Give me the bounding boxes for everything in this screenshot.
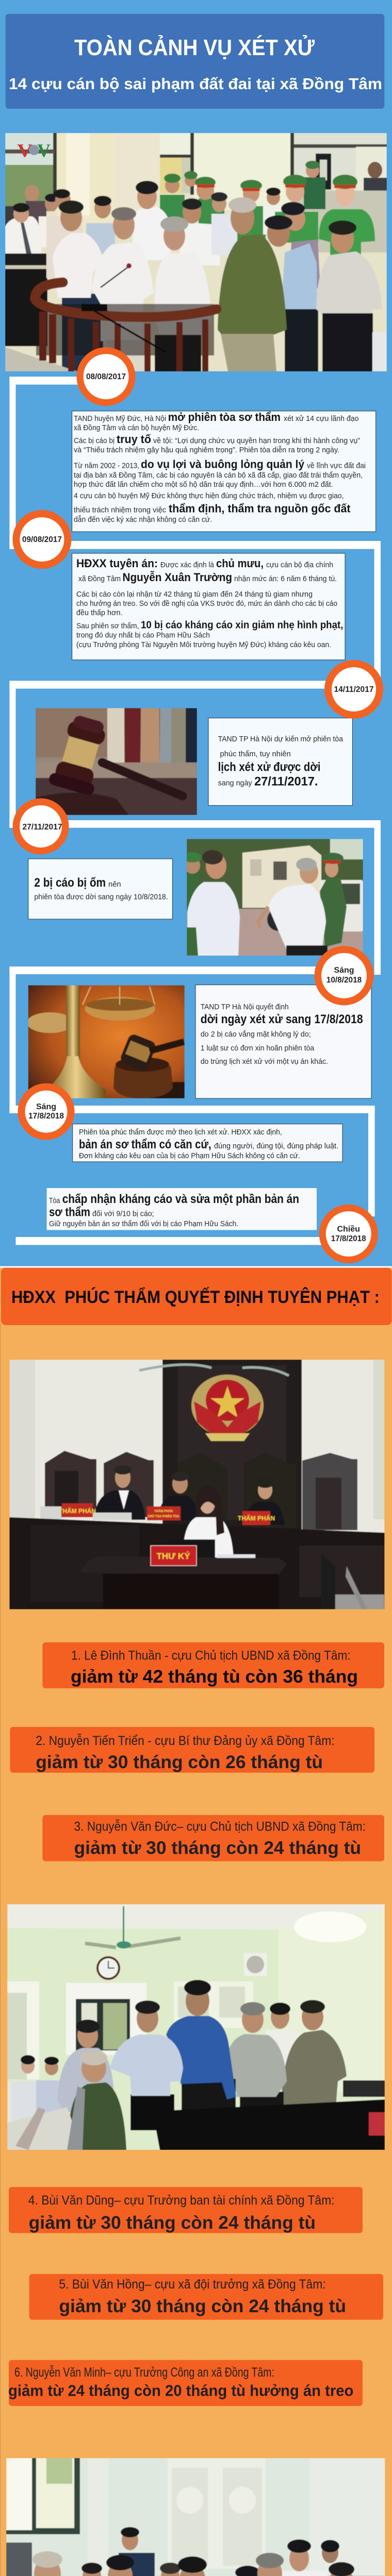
text box: trial moved to 17/8/2018 xyxy=(195,985,371,1098)
text box: hearing postponed to 27/11/2017 xyxy=(208,718,352,805)
date circle: 09/08/2017: 09/08/2017 xyxy=(22,535,62,544)
text box: court accepts appeal: sơ thẩm xyxy=(49,1206,90,1219)
text box: hearing postponed to 27/11/2017: TAND TP Hà Nội dự kiến mở phiên tòa xyxy=(218,735,344,743)
text box: verdict at first instance: Nguyễn Xuân Trường xyxy=(123,571,232,584)
sentence row 3: giảm từ 30 tháng còn 24 tháng tù xyxy=(74,1838,361,1858)
text box: first-instance trial: và “Thiếu trách nhiệm gây hậu quả nghiêm trọng”. Phiên tòa diễn ra trong 2 ngày. xyxy=(74,446,339,454)
date circle: 09/08/2017 xyxy=(12,510,71,569)
text box: first-instance trial: truy tố xyxy=(117,433,151,446)
text box: first-instance trial: TAND huyện Mỹ Đức, Hà Nội xyxy=(74,414,166,423)
text box: appeal hearing finding: Phiên tòa phúc thẩm được mở theo lịch xét xử. HĐXX xác định, xyxy=(79,1128,282,1137)
text box: first-instance trial: thẩm định, thẩm tra nguồn gốc đất xyxy=(169,502,351,515)
text box: verdict at first instance: cho hưởng án treo. So với đề nghị của VKS trước đó, mức án dành cho các bị cáo xyxy=(76,599,337,608)
text box: hearing postponed to 27/11/2017: phúc thẩm, tuy nhiên xyxy=(220,750,291,758)
date circle: 14/11/2017: 14/11/2017 xyxy=(334,685,374,694)
text box: first-instance trial: do vụ lợi và buông lỏng quản lý xyxy=(141,457,305,471)
text box: first-instance trial: hợp thức đất lấn chiếm cho một số hộ dân trái quy định…với hơn 6.000 m2 đất. xyxy=(74,480,333,489)
text box: trial moved to 17/8/2018: TAND TP Hà Nội quyết định xyxy=(201,1003,289,1011)
text box: verdict at first instance: Sau phiên sơ thẩm, xyxy=(76,622,139,631)
text box: hearing postponed to 27/11/2017: lịch xét xử được dời xyxy=(218,760,320,774)
logo: VOV watermark: V xyxy=(17,140,32,161)
date circle: morning 10/8/2018: Sáng xyxy=(334,966,354,975)
sentence row 1 xyxy=(42,1642,384,1688)
title: TOÀN CẢNH VỤ XÉT XỬ xyxy=(74,34,315,60)
text box: first-instance trial: xét xử 14 cựu lãnh đạo xyxy=(284,414,359,423)
sentence row 1: giảm từ 42 tháng tù còn 36 tháng xyxy=(71,1667,358,1687)
sentence row 3: 3. Nguyễn Văn Đức– cựu Chủ tịch UBND xã Đồng Tâm: xyxy=(74,1819,366,1834)
date circle: 27/11/2017: 27/11/2017 xyxy=(23,823,62,832)
sentence row 1: 1. Lê Đình Thuần - cựu Chủ tịch UBND xã Đồng Tâm: xyxy=(71,1648,351,1663)
date circle: 27/11/2017 xyxy=(12,799,69,854)
text box: first-instance trial: Các bị cáo bị xyxy=(74,436,115,445)
text box: verdict at first instance: chủ mưu, xyxy=(216,557,264,570)
panel: header xyxy=(6,14,384,109)
text box: two defendants ill: nên xyxy=(108,880,121,889)
sentence row 6: 6. Nguyễn Văn Minh– cựu Trưởng Công an xã Đồng Tâm: xyxy=(14,2365,274,2380)
text box: first-instance trial: về tội: “Lợi dụng chức vụ quyền hạn trong khi thi hành công vụ” xyxy=(153,436,360,445)
text box: first-instance trial: Từ năm 2002 - 2013, xyxy=(74,462,139,470)
text box: two defendants ill xyxy=(28,859,172,919)
text box: first-instance trial: thiếu trách nhiệm trong việc xyxy=(74,506,166,515)
text box: appeal hearing finding: bản án sơ thẩm có căn cứ, xyxy=(79,1138,211,1151)
text box: appeal hearing finding: Đơn kháng cáo kêu oan của bị cáo Phạm Hữu Sách không có căn cứ. xyxy=(79,1151,300,1160)
date circle: afternoon 17/8/2018: 17/8/2018 xyxy=(331,1234,366,1243)
text box: verdict at first instance: xã Đồng Tâm xyxy=(78,574,121,583)
photo: appeal court judges' bench xyxy=(9,1360,385,1609)
date circle: afternoon 17/8/2018: Chiều xyxy=(337,1225,360,1234)
text box: trial moved to 17/8/2018: dời ngày xét xử sang 17/8/2018 xyxy=(201,1012,363,1026)
date circle: afternoon 17/8/2018 xyxy=(319,1205,378,1263)
subtitle: 14 cựu cán bộ sai phạm đất đai tại xã Đồng Tâm xyxy=(9,75,382,93)
text box: verdict at first instance: Các bị cáo còn lại nhận từ 42 tháng tù giam đến 24 tháng tù giam nhưng xyxy=(76,590,313,599)
text box: court accepts appeal: đối với 9/10 bị cáo; xyxy=(92,1210,154,1218)
photo: appeal court judges' bench: THƯ KÝ xyxy=(156,1551,190,1561)
text box: court accepts appeal: Giữ nguyên bản án sơ thẩm đối với bị cáo Phạm Hữu Sách. xyxy=(49,1219,238,1228)
sentence row 5: giảm từ 30 tháng còn 24 tháng tù xyxy=(59,2296,346,2316)
photo: appeal court judges' bench: CHỦ TỌA PHIÊN TÒA xyxy=(148,1514,179,1518)
sentence row 3 xyxy=(42,1815,384,1861)
text box: court accepts appeal xyxy=(47,1188,317,1230)
text box: verdict at first instance: trong đó duy nhất bị cáo Phạm Hữu Sách xyxy=(76,631,210,640)
panel: appeal verdict heading xyxy=(0,1266,392,1325)
logo: VOV watermark: V xyxy=(37,140,51,161)
text box: trial moved to 17/8/2018: do trùng lịch xét xử với một vụ án khác. xyxy=(201,1057,328,1066)
date circle: 08/08/2017: 08/08/2017 xyxy=(86,372,126,381)
text box: court accepts appeal: chấp nhận kháng cáo và sửa một phần bản án xyxy=(62,1192,299,1206)
date circle: morning 17/8/2018: Sáng xyxy=(36,1103,56,1111)
date circle: morning 17/8/2018 xyxy=(18,1083,74,1140)
photo: appeal court judges' bench: THẨM PHÁN xyxy=(154,1510,173,1513)
logo: VOV watermark xyxy=(17,140,51,161)
date circle: 14/11/2017 xyxy=(324,660,383,719)
text box: verdict at first instance xyxy=(72,553,345,660)
sentence row 4 xyxy=(9,2187,363,2233)
photo: defendants escorted from prison van xyxy=(187,839,363,956)
sentence row 4: 4. Bùi Văn Dũng– cựu Trưởng ban tài chính xã Đồng Tâm: xyxy=(28,2193,335,2208)
text box: verdict at first instance: nhận mức án: 6 năm 6 tháng tù. xyxy=(234,574,337,583)
text box: appeal hearing finding xyxy=(73,1124,342,1162)
text box: verdict at first instance: Được xác định là xyxy=(160,561,215,569)
panel: timeline blue background xyxy=(0,0,392,1266)
date circle: morning 10/8/2018 xyxy=(315,946,373,1005)
photo: scales of justice and gavel xyxy=(28,985,185,1098)
text box: court accepts appeal: Tòa xyxy=(49,1196,60,1205)
text box: two defendants ill: 2 bị cáo bị ốm xyxy=(34,876,106,890)
text box: first-instance trial: về lĩnh vực đất đai xyxy=(307,462,366,470)
text box: verdict at first instance: đều thấp hơn. xyxy=(76,608,123,617)
text box: first-instance trial xyxy=(72,411,376,532)
text box: verdict at first instance: cựu cán bộ địa chính xyxy=(266,561,333,569)
photo: defendants seated in court xyxy=(6,2458,385,2576)
sentence row 2 xyxy=(10,1727,374,1773)
photo: appeal court judges' bench: THẨM PHÁN xyxy=(238,1514,275,1522)
text box: first-instance trial: tại địa bàn xã Đồng Tâm, các bị cáo nguyên là cán bộ xã đã cấp, giao đất trái thẩm quyền, xyxy=(74,471,363,480)
text box: appeal hearing finding: đúng người, đúng tội, đúng pháp luật. xyxy=(214,1142,338,1150)
text box: verdict at first instance: 10 bị cáo kháng cáo xin giảm nhẹ hình phạt, xyxy=(141,620,344,631)
text box: trial moved to 17/8/2018: do 2 bị cáo vắng mặt không lý do; xyxy=(201,1030,311,1039)
photo: defendants standing at appeal hearing xyxy=(7,1904,385,2150)
photo: appeal court judges' bench: THẨM PHÁN xyxy=(59,1507,96,1515)
photo: defendants standing in court xyxy=(5,133,387,371)
text box: hearing postponed to 27/11/2017: sang ngày xyxy=(218,779,252,787)
date circle: morning 10/8/2018: 10/8/2018 xyxy=(326,976,362,985)
text box: first-instance trial: 4 cựu cán bộ huyện Mỹ Đức không thực hiện đúng chức trách, nhiệm vụ được giao, xyxy=(74,492,344,500)
text box: verdict at first instance: (cựu Trưởng phòng Tài Nguyên Môi trường huyện Mỹ Đức) kháng cáo kêu oan. xyxy=(76,640,331,649)
text box: first-instance trial: dẫn đến việc ký xác nhận không có căn cứ. xyxy=(74,515,212,524)
date circle: 08/08/2017 xyxy=(76,347,135,406)
timeline connector lines xyxy=(9,377,381,1245)
sentence row 6 xyxy=(8,2360,363,2406)
sentence row 2: giảm từ 30 tháng còn 26 tháng tù xyxy=(36,1752,323,1772)
date circle: morning 17/8/2018: 17/8/2018 xyxy=(28,1112,64,1121)
sentence row 4: giảm từ 30 tháng còn 24 tháng tù xyxy=(29,2213,316,2233)
sentence row 2: 2. Nguyễn Tiến Triển - cựu Bí thư Đảng ủy xã Đồng Tâm: xyxy=(36,1733,335,1748)
sentence row 6: giảm từ 24 tháng còn 20 tháng tù hưởng án treo xyxy=(8,2382,353,2400)
text box: hearing postponed to 27/11/2017: 27/11/2017. xyxy=(254,775,318,788)
text box: two defendants ill: phiên tòa được dời sang ngày 10/8/2018. xyxy=(34,892,168,902)
text box: verdict at first instance: HĐXX tuyên án: xyxy=(76,557,158,570)
text box: first-instance trial: mở phiên tòa sơ thẩm xyxy=(168,411,281,423)
text box: first-instance trial: xã Đồng Tâm và cán bộ huyện Mỹ Đức. xyxy=(74,423,199,432)
photo: judge's gavel and books xyxy=(36,708,197,815)
sentence row 5: 5. Bùi Văn Hồng– cựu xã đội trưởng xã Đồng Tâm: xyxy=(59,2277,326,2292)
panel: verdict orange background xyxy=(0,1266,392,2576)
text box: trial moved to 17/8/2018: 1 luật sư có đơn xin hoãn phiên tòa xyxy=(201,1044,315,1053)
sentence row 5 xyxy=(29,2274,383,2320)
